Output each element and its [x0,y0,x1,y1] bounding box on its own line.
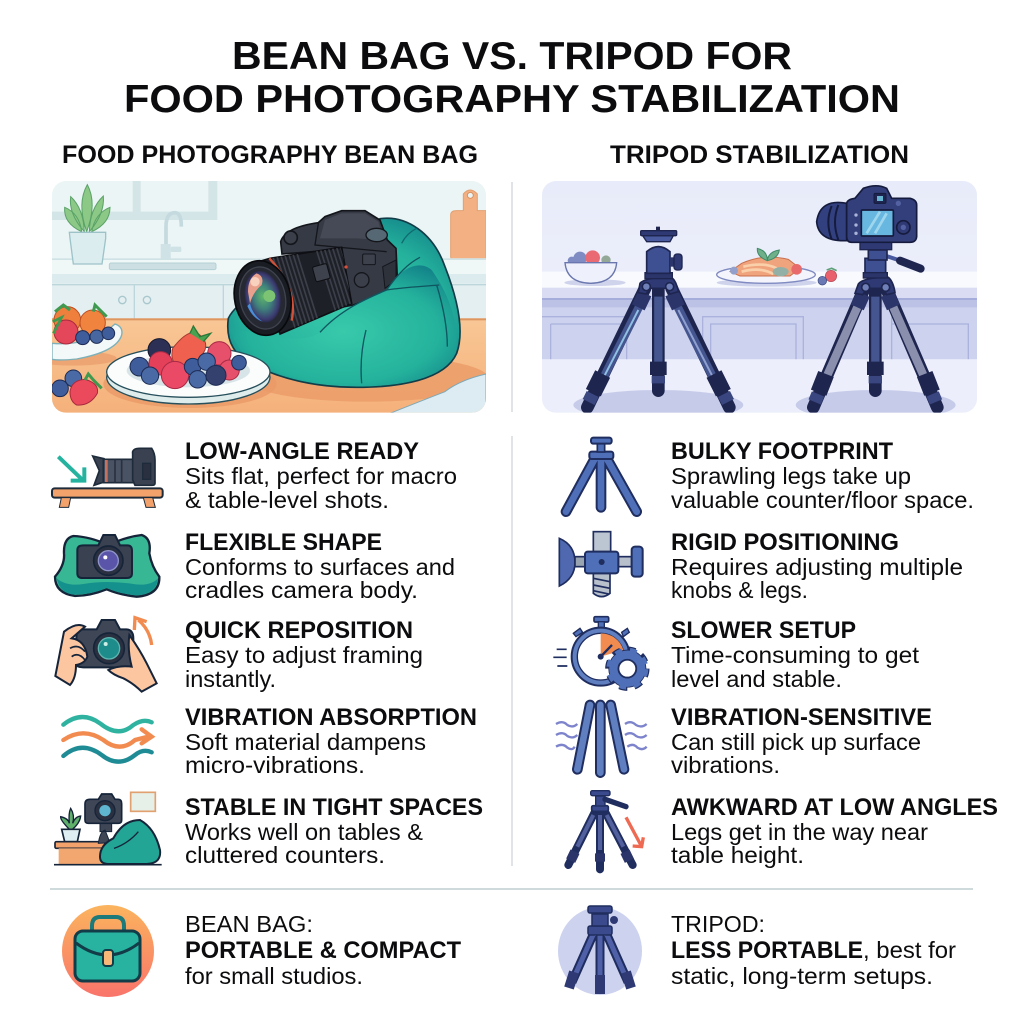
description [671,819,928,868]
description [671,554,963,603]
description: cluttered counters. [185,842,385,868]
heading: QUICK REPOSITION [185,617,413,644]
summary text: TRIPOD: [671,911,765,937]
heading: VIBRATION-SENSITIVE [671,704,932,731]
icon: tripod clamp and knob [559,532,643,597]
icon: hands holding camera [55,618,157,692]
description: level and stable. [671,666,842,692]
item: vibration absorption [63,704,477,778]
heading: STABLE IN TIGHT SPACES [185,794,483,821]
bag shadow [270,362,486,402]
description [185,642,423,692]
camera on tripod [817,186,917,242]
description [671,729,921,778]
bag front lobe [344,265,452,384]
counter and cabinets [52,258,486,320]
heading: food photography bean bag: FOOD PHOTOGRAPHY BEAN BAG [62,141,478,169]
summary text [671,911,956,989]
summary text: LESS PORTABLE [671,937,863,964]
description [185,463,457,513]
summary text: BEAN BAG: [185,911,313,937]
description: Easy to adjust framing [185,642,423,668]
description: Sits flat, perfect for macro [185,463,457,489]
icon: fruit bowl [564,250,626,286]
icon: teal bag badge [62,905,154,997]
description: Requires adjusting multiple [671,554,963,580]
item: low-angle ready [52,438,457,513]
icon: bowl of fruit [52,302,123,366]
icon: vibrating tripod legs [556,705,647,773]
item: quick reposition [55,617,423,692]
heading: tripod stabilization: TRIPOD STABILIZATION [610,141,909,169]
description: micro-vibrations. [185,752,365,778]
item: awkward at low angles [568,791,998,869]
heading: FLEXIBLE SHAPE [185,529,382,556]
item: rigid positioning [559,529,963,603]
item: stable in tight spaces [54,792,483,868]
description: vibrations. [671,752,780,778]
description: instantly. [185,666,276,692]
description: Conforms to surfaces and [185,554,455,580]
description [671,642,919,692]
column: tripod drawbacks [553,438,998,869]
heading: SLOWER SETUP [671,617,856,644]
description: Soft material dampens [185,729,426,755]
heading: LOW-ANGLE READY [185,438,419,465]
summary text: , best for [863,937,956,963]
description: cradles camera body. [185,577,418,603]
summary: bean bag [62,905,461,997]
icon: plate of food [717,248,837,287]
window frame [52,181,217,220]
item: slower setup [553,617,919,692]
icon: left tripod [587,227,729,407]
table [52,318,486,415]
counter [542,272,977,420]
icon: faucet [166,213,181,257]
item: bulky footprint [566,438,974,513]
description: & table-level shots. [185,487,389,513]
heading: RIGID POSITIONING [671,529,899,556]
icon: cutting board [451,190,486,261]
icon: right tripod with camera [813,186,937,407]
heading: VIBRATION ABSORPTION [185,704,477,731]
heading: AWKWARD AT LOW ANGLES [671,794,998,821]
description: Sprawling legs take up [671,463,911,489]
icon: studio scene [54,792,162,865]
icon: camera cradled in bag [55,535,159,597]
lens barrel and front element [227,247,352,341]
icon: loose berries [52,370,102,405]
bean bag [228,218,460,387]
icon: wide tripod [566,438,637,512]
description: table height. [671,842,804,868]
description: valuable counter/floor space. [671,487,974,513]
description: Time-consuming to get [671,642,919,668]
heading: BULKY FOOTPRINT [671,438,893,465]
description [671,463,974,513]
summary text: static, long-term setups. [671,963,933,989]
icon: stopwatch and gear [553,617,647,688]
description: Can still pick up surface [671,729,921,755]
icon: camera on table [52,448,163,507]
summary text: PORTABLE & COMPACT [185,937,461,964]
panel: bean bag kitchen illustration [30,181,488,415]
panel: tripod kitchen illustration [542,181,977,420]
column: bean bag features [52,438,483,868]
description [185,554,455,603]
icon: damped waves [63,717,152,762]
summary text: for small studios. [185,963,363,989]
title: BEAN BAG VS. TRIPOD FOR [232,35,792,78]
item: flexible shape [55,529,455,603]
description: Works well on tables & [185,819,423,845]
icon: tripod badge [558,906,642,995]
item: vibration-sensitive [556,704,932,778]
description: knobs & legs. [671,577,808,603]
icon: napkin [390,374,486,415]
description [185,729,426,778]
description: Legs get in the way near [671,819,928,845]
summary text [185,911,461,989]
summary: tripod [558,906,956,995]
title: FOOD PHOTOGRAPHY STABILIZATION [124,78,900,121]
title [124,35,900,121]
icon: potted plant [65,185,110,264]
icon: tripod with down arrow [568,791,643,869]
description [185,819,423,868]
camera body [281,211,397,310]
icon: plate of berries [103,326,277,408]
